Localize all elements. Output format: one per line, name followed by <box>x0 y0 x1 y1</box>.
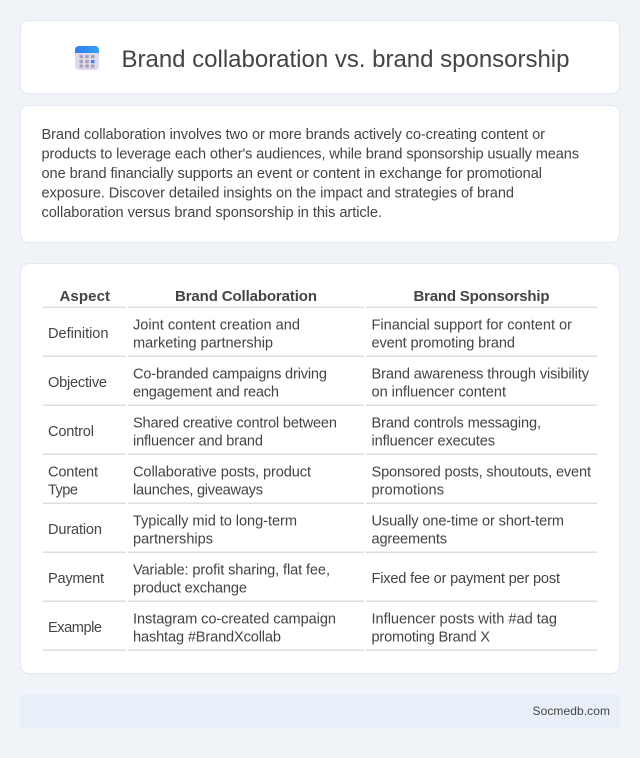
row: definition <box>48 317 572 351</box>
row: payment: product exchange <box>133 580 247 596</box>
row: control: Shared creative control between <box>133 415 337 431</box>
row: example: Example <box>48 620 102 636</box>
panel: comparison table <box>20 264 620 674</box>
table header row: Brand Sponsorship <box>414 288 550 305</box>
row: duration: Duration <box>48 522 102 538</box>
intro paragraph: Brand collaboration involves two or more brands actively co-creating content or <box>42 127 545 143</box>
row: objective: Objective <box>48 375 107 391</box>
row: payment: Fixed fee or payment per post <box>372 571 560 587</box>
footer source: Socmedb.com <box>532 704 610 718</box>
row: duration <box>48 513 564 547</box>
row: content type: launches, giveaways <box>133 482 263 498</box>
table rules <box>43 306 597 651</box>
row: payment <box>48 562 560 596</box>
row: definition: event promoting brand <box>372 335 515 351</box>
row: objective: Brand awareness through visibility <box>372 366 590 382</box>
row: objective: on influencer content <box>372 384 506 400</box>
row: content type: Type <box>48 482 78 498</box>
row: content type <box>48 464 591 498</box>
intro paragraph: one brand financially supports an event or content in exchange for promotional <box>42 166 542 182</box>
intro paragraph: collaboration versus brand sponsorship in this article. <box>42 205 382 221</box>
intro paragraph: exposure. Discover detailed insights on the impact and strategies of brand <box>42 186 514 202</box>
row: objective: Co-branded campaigns driving <box>133 366 327 382</box>
row: example: promoting Brand X <box>372 629 490 645</box>
row: duration: agreements <box>372 531 447 547</box>
row: example: Instagram co-created campaign <box>133 611 336 627</box>
panel: introduction <box>20 106 620 242</box>
panel: title header <box>20 20 620 94</box>
row: content type: Content <box>48 464 98 480</box>
row: definition: Joint content creation and <box>133 317 300 333</box>
row: duration: partnerships <box>133 531 213 547</box>
row: control: Brand controls messaging, <box>372 415 541 431</box>
row: payment: Payment <box>48 571 104 587</box>
row: content type: promotions <box>372 482 444 498</box>
row: control: influencer executes <box>372 433 495 449</box>
row: control <box>48 415 541 449</box>
row: content type: Collaborative posts, product <box>133 464 311 480</box>
row: control: Control <box>48 424 94 440</box>
intro paragraph: products to leverage each other's audiences, while brand sponsorship usually means <box>42 146 579 162</box>
row: example: hashtag #BrandXcollab <box>133 629 281 645</box>
icon: calendar <box>75 46 99 70</box>
row: example <box>48 611 557 645</box>
table header row: Aspect <box>60 288 110 305</box>
row: content type: Sponsored posts, shoutouts, event <box>372 464 591 480</box>
title: Brand collaboration vs. brand sponsorship <box>122 46 570 73</box>
row: definition: marketing partnership <box>133 335 273 351</box>
row: control: influencer and brand <box>133 433 263 449</box>
row: duration: Typically mid to long-term <box>133 513 297 529</box>
footer bar <box>20 694 620 728</box>
table header row: Brand Collaboration <box>175 288 317 305</box>
row: objective: engagement and reach <box>133 384 279 400</box>
row: payment: Variable: profit sharing, flat fee, <box>133 562 330 578</box>
row: example: Influencer posts with #ad tag <box>372 611 557 627</box>
row: definition: Definition <box>48 326 108 342</box>
row: objective <box>48 366 590 400</box>
row: duration: Usually one-time or short-term <box>372 513 564 529</box>
intro paragraph <box>42 127 579 221</box>
row: definition: Financial support for content or <box>372 317 572 333</box>
table header row <box>60 288 550 305</box>
